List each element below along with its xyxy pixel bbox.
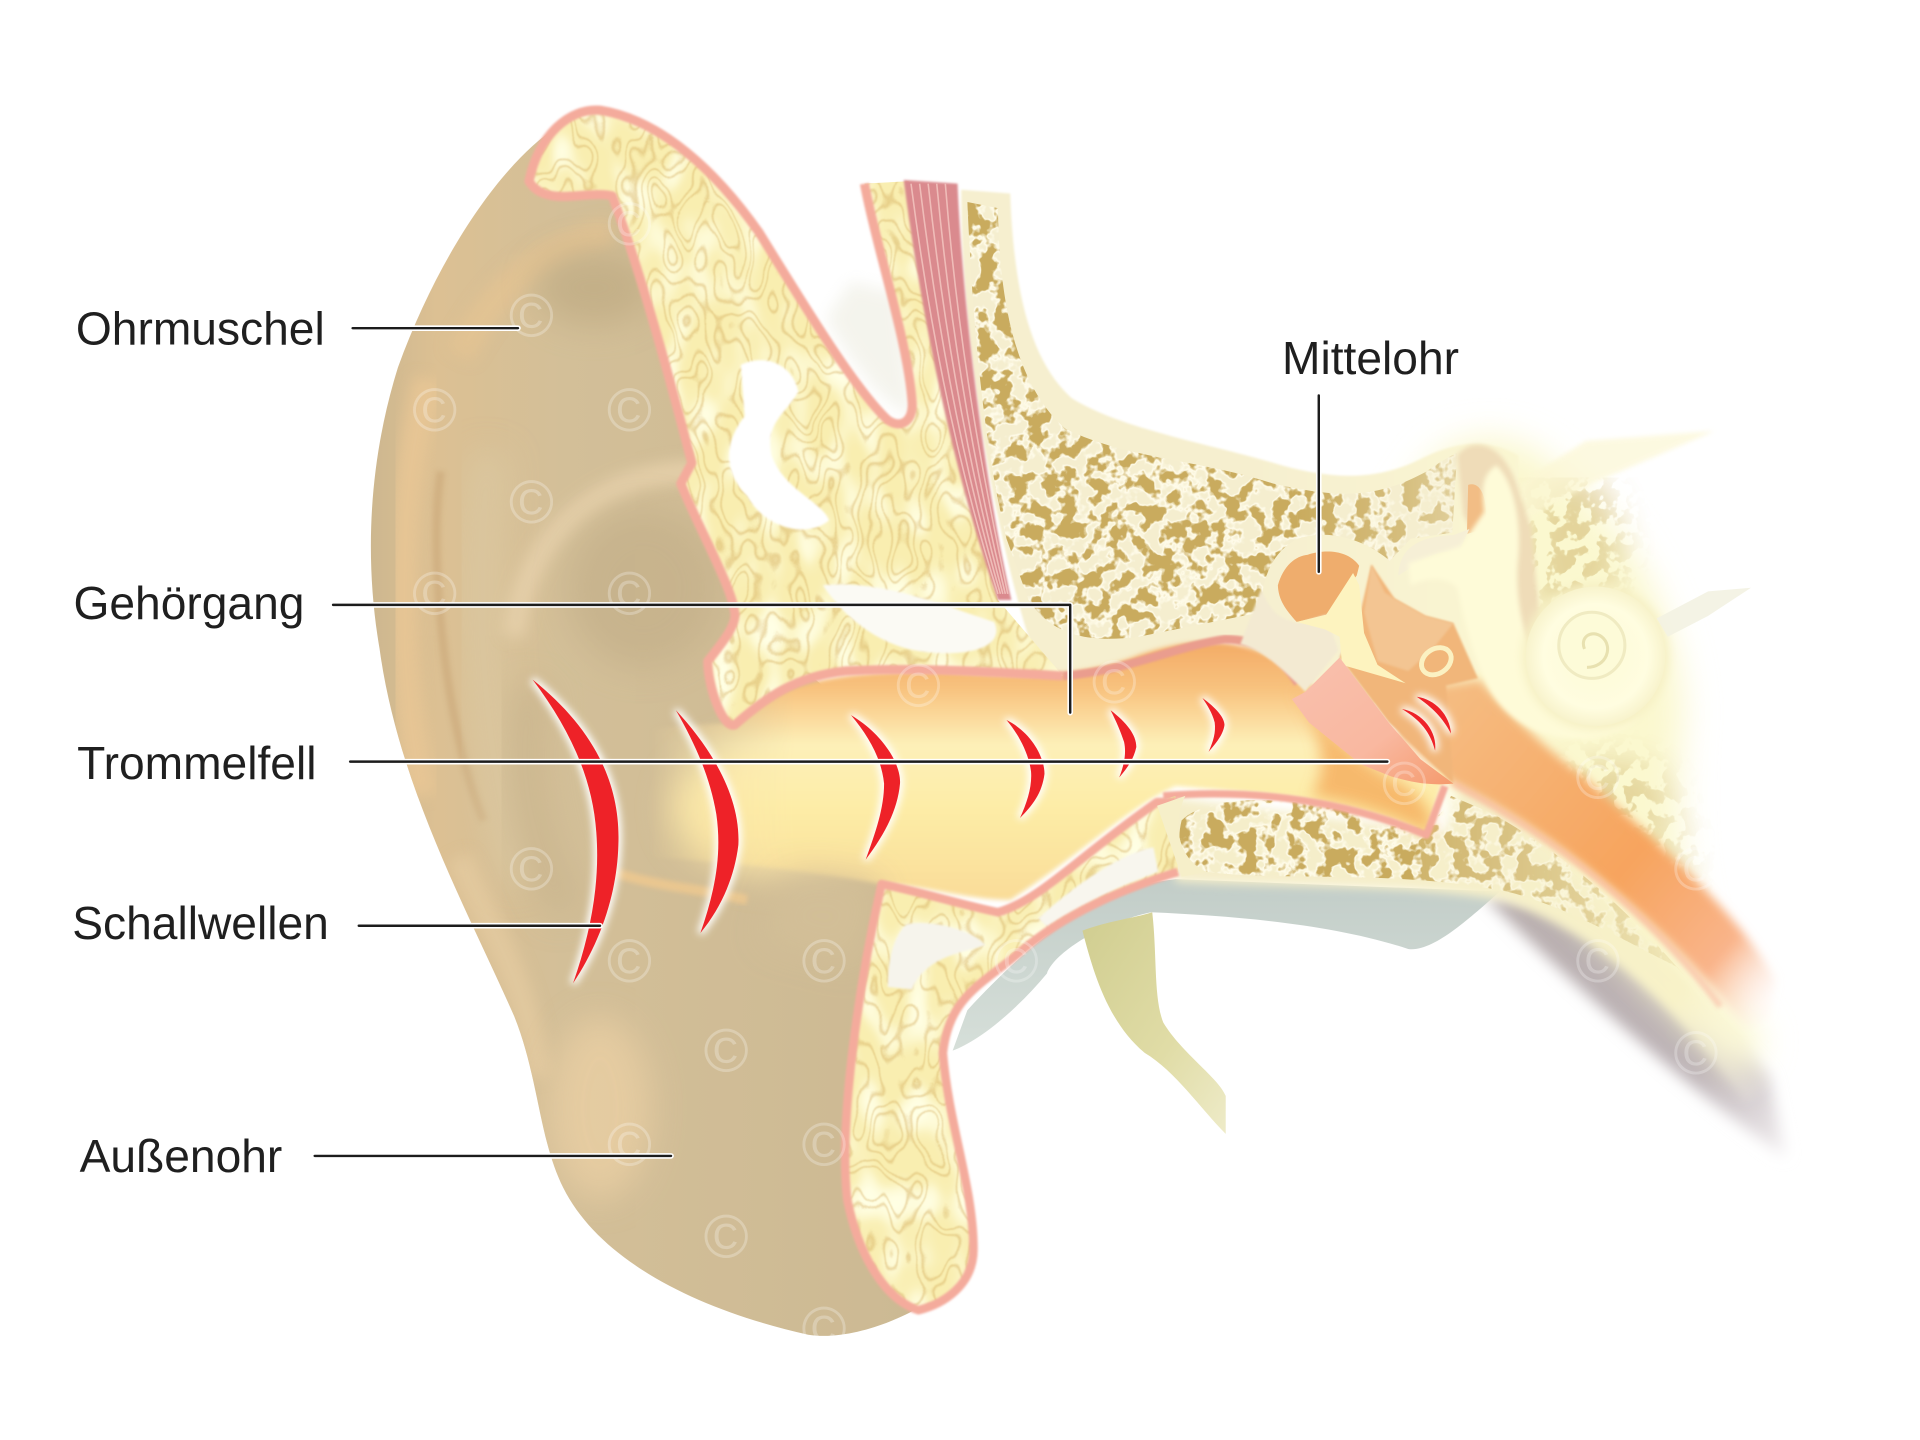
label: Gehörgang: Gehörgang	[73, 577, 304, 629]
copyright watermarks: ©	[509, 835, 554, 903]
muscle strip	[904, 180, 1011, 600]
upper cartilage section	[520, 104, 1071, 735]
copyright watermarks: ©	[704, 1203, 749, 1271]
cochlea	[1522, 583, 1751, 730]
middle ear cavity	[1278, 552, 1478, 784]
eustachian tube	[1396, 680, 1776, 1029]
ear canal glow on skin	[673, 741, 894, 876]
copyright watermarks: ©	[1575, 743, 1621, 811]
copyright watermarks: ©	[994, 927, 1039, 995]
copyright watermarks: ©	[607, 376, 652, 444]
copyright watermarks: ©	[1575, 927, 1621, 995]
copyright watermarks: ©	[1382, 749, 1427, 817]
notch shadow between cartilage flaps	[827, 282, 912, 416]
pink skin outline lower	[845, 802, 1178, 1310]
copyright watermarks: ©	[802, 1294, 847, 1362]
leader lines	[315, 328, 1387, 1156]
copyright watermarks	[412, 190, 1718, 1362]
bone rim beside lower cartilage	[1157, 796, 1206, 877]
lower cartilage section	[833, 796, 1188, 1316]
copyright watermarks: ©	[412, 190, 457, 258]
copyright watermarks: ©	[1673, 1019, 1718, 1087]
eardrum	[1292, 658, 1453, 784]
pale inner-ear bone background	[1414, 424, 1771, 1080]
copyright watermarks: ©	[704, 1016, 749, 1084]
copyright watermarks: ©	[802, 927, 847, 995]
spongy bone texture: lower	[1180, 796, 1678, 968]
copyright watermarks: ©	[607, 560, 652, 628]
copyright watermarks: ©	[607, 1111, 652, 1179]
copyright watermarks: ©	[412, 560, 457, 628]
bone wall and pale ring around cavity	[1240, 589, 1338, 692]
sound waves	[533, 680, 1451, 983]
skin shading: helix, antihelix, concha, lobe	[403, 233, 747, 1200]
copyright watermarks: ©	[1673, 835, 1718, 903]
pink skin outline upper	[529, 110, 1063, 725]
upper temporal bone	[961, 190, 1518, 710]
copyright watermarks: ©	[509, 282, 554, 350]
copyright watermarks: ©	[607, 927, 652, 995]
ear anatomy infographic	[74, 104, 1784, 1336]
label: Mittelohr: Mittelohr	[1282, 332, 1459, 384]
inner ear vestibule and canals	[1398, 431, 1714, 739]
white fat deposits lower	[888, 923, 986, 989]
copyright watermarks: ©	[802, 1111, 847, 1179]
pink canal lining right of cartilage	[1063, 639, 1445, 835]
label: Trommelfell: Trommelfell	[77, 737, 317, 789]
label: Schallwellen: Schallwellen	[72, 897, 329, 949]
label: Ohrmuschel: Ohrmuschel	[76, 303, 325, 355]
copyright watermarks: ©	[607, 190, 652, 258]
ossicles	[1297, 573, 1456, 683]
copyright watermarks: ©	[896, 652, 941, 720]
copyright watermarks: ©	[509, 468, 554, 536]
yellow-green nerve strand	[1082, 912, 1226, 1134]
ear canal	[676, 640, 1444, 903]
grey tissue shadow behind canal	[1484, 896, 1785, 1157]
outer ear skin	[371, 113, 918, 1336]
label: Außenohr: Außenohr	[80, 1130, 282, 1182]
white fat deposits	[729, 360, 829, 530]
spongy bone texture: upper	[967, 202, 1456, 639]
lower temporal bone	[1163, 784, 1776, 1102]
copyright watermarks: ©	[412, 376, 457, 444]
copyright watermarks: ©	[1092, 648, 1137, 716]
blue-grey membrane under canal	[953, 879, 1500, 1051]
